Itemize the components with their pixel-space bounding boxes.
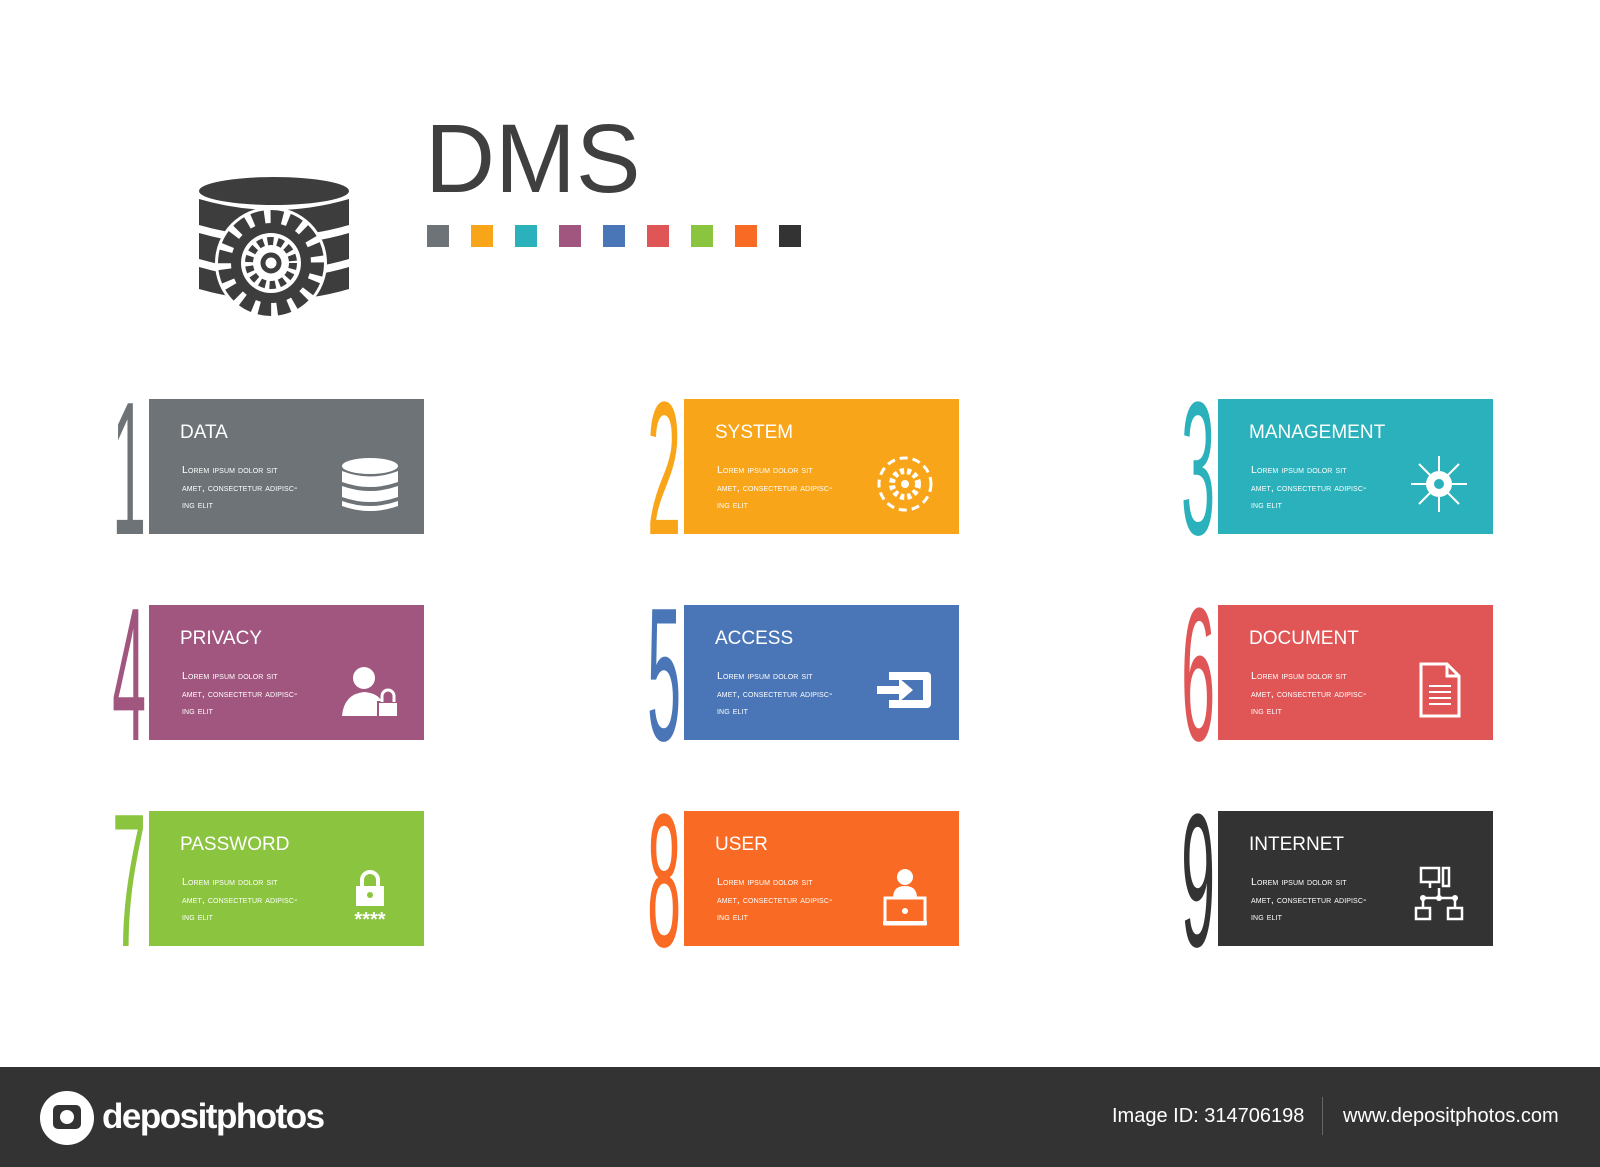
card 9: internet: INTERNET [1249,834,1344,855]
card 6: document: DOCUMENT [1249,628,1359,649]
card 6: document [1181,602,1493,742]
card 2: system: ing elit [717,499,748,511]
card 5: access: ACCESS [715,628,793,649]
card 4: privacy: Lorem ipsum dolor sit [182,670,278,682]
card 4: privacy [112,602,424,742]
card 4: privacy: PRIVACY [180,628,262,649]
card 7: password: ing elit [182,911,213,923]
card 3: management [1181,396,1493,536]
website: www.depositphotos.com [1343,1105,1559,1127]
card 8: user: ing elit [717,911,748,923]
card 6: document: amet, consectetur adipisc- [1251,688,1367,700]
card 1: data: amet, consectetur adipisc- [182,482,298,494]
card 6: document: ing elit [1251,705,1282,717]
card 5: access: ing elit [717,705,748,717]
card 8: user [647,808,959,948]
card 6: document: Lorem ipsum dolor sit [1251,670,1347,682]
logo [40,1091,324,1145]
card 9: internet: amet, consectetur adipisc- [1251,894,1367,906]
card 1: data: DATA [180,422,228,443]
card 5: access: Lorem ipsum dolor sit [717,670,813,682]
card 3: management: Lorem ipsum dolor sit [1251,464,1347,476]
card 4: privacy: amet, consectetur adipisc- [182,688,298,700]
icon: database gear [199,177,349,316]
card 1: data: ing elit [182,499,213,511]
card 9: internet: Lorem ipsum dolor sit [1251,876,1347,888]
title: DMS [425,104,641,213]
card 3: management: amet, consectetur adipisc- [1251,482,1367,494]
card 8: user: USER [715,834,768,855]
card 8: user: amet, consectetur adipisc- [717,894,833,906]
image id: Image ID: 314706198 [1112,1105,1304,1127]
card 2: system: SYSTEM [715,422,793,443]
card 3: management: MANAGEMENT [1249,422,1385,443]
card 2: system: Lorem ipsum dolor sit [717,464,813,476]
card 7: password [112,808,424,948]
footer bar [0,1067,1600,1167]
logo: depositphotos [102,1097,324,1136]
card 2: system: amet, consectetur adipisc- [717,482,833,494]
card 7: password: PASSWORD [180,834,289,855]
card 7: password: amet, consectetur adipisc- [182,894,298,906]
card 5: access [647,602,959,742]
card 1: data: Lorem ipsum dolor sit [182,464,278,476]
card 9: internet: ing elit [1251,911,1282,923]
card 4: privacy: ing elit [182,705,213,717]
card 2: system [647,396,959,536]
card 9: internet [1181,808,1493,948]
card 1: data [112,396,424,536]
card 8: user: Lorem ipsum dolor sit [717,876,813,888]
card 3: management: ing elit [1251,499,1282,511]
color squares [427,225,801,247]
card 7: password: Lorem ipsum dolor sit [182,876,278,888]
card 5: access: amet, consectetur adipisc- [717,688,833,700]
